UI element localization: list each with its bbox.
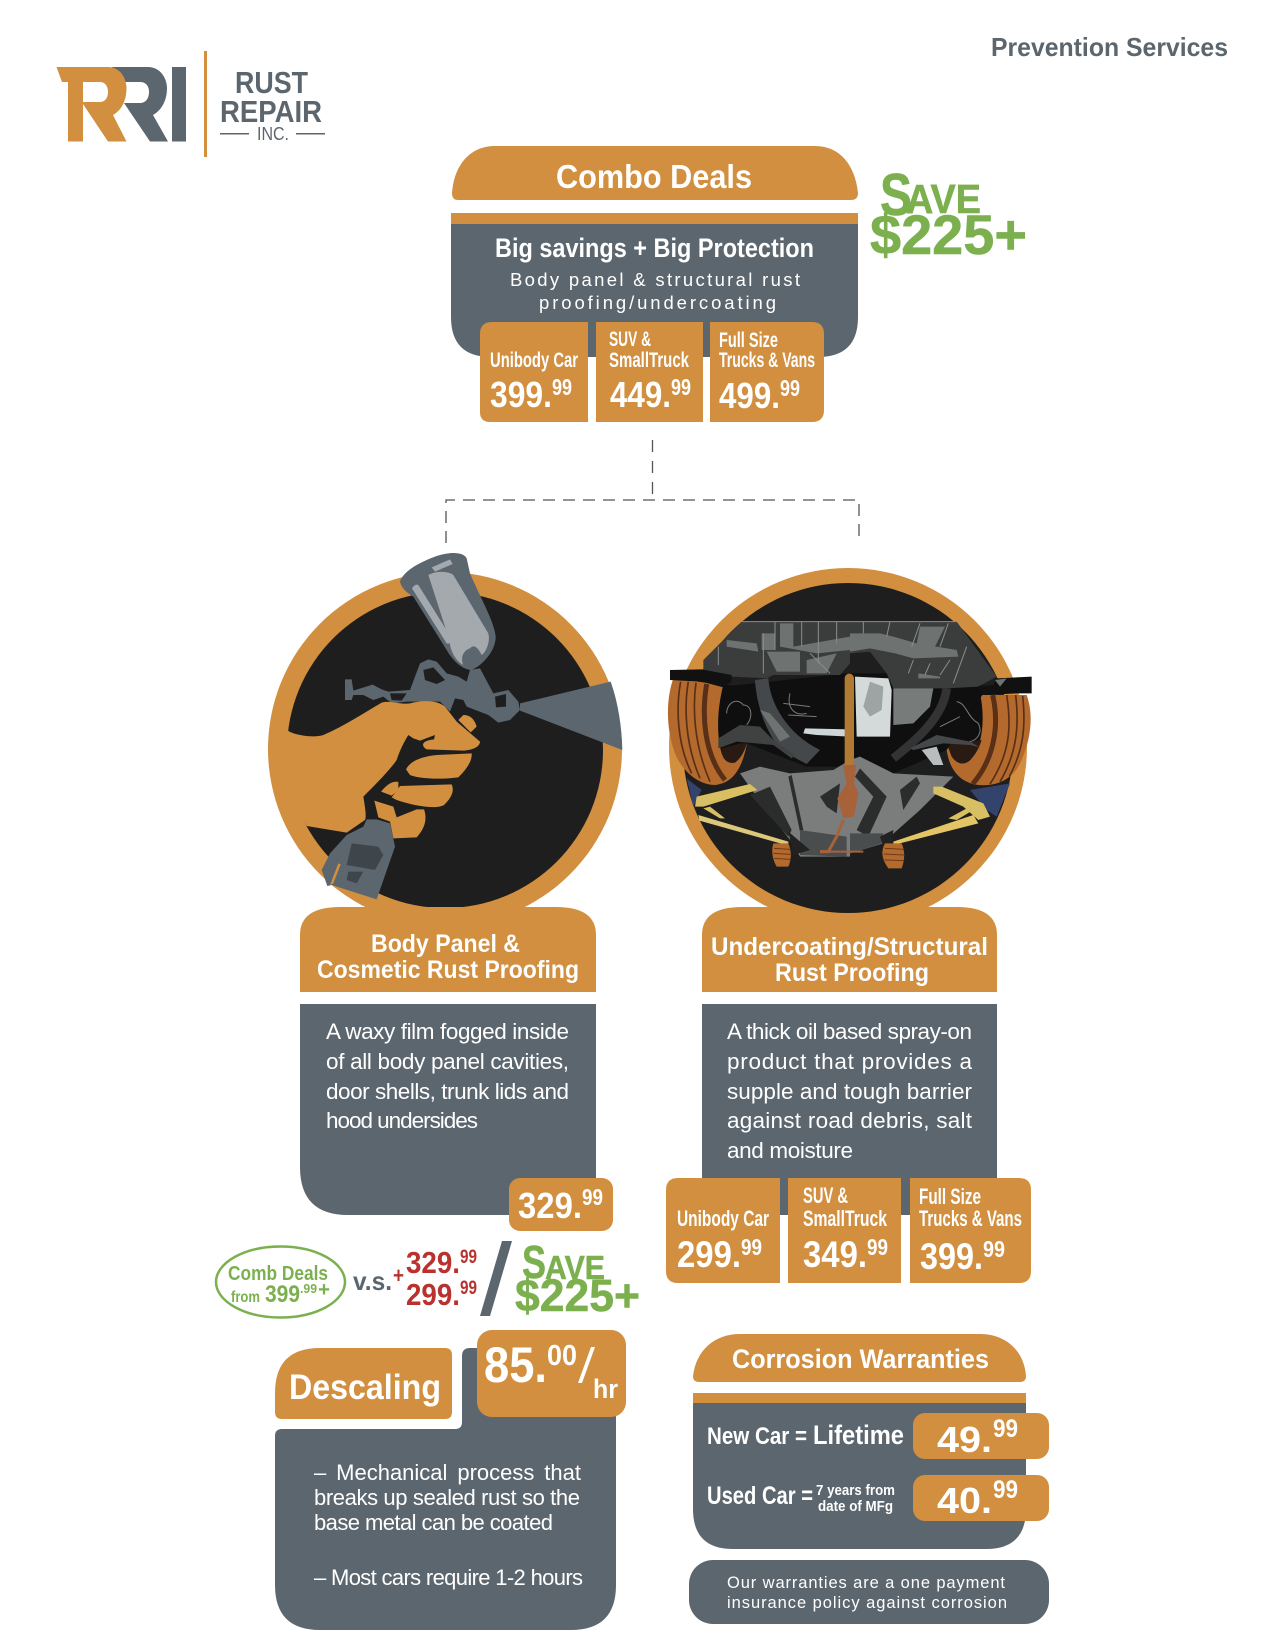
comparison: combo deals versus separate prices [216,1236,640,1321]
price box: unibody car [480,322,588,422]
combo deals text: Big savings + Big Protection [495,233,814,263]
undercoating title: Undercoating/Structural [711,933,988,961]
combo deals text: proofing/undercoating [539,292,776,313]
undercoating description text: and moisture [727,1138,853,1163]
price box: SUV and small truck: SmallTruck [609,349,689,372]
slash divider [480,1241,512,1316]
icon: bottom canister [322,819,395,899]
separate prices in red: 99 [460,1278,477,1299]
body panel title: Cosmetic Rust Proofing [317,956,579,984]
price box: SUV and small truck [788,1178,901,1283]
callout: save 225 plus [515,1236,640,1321]
icon: spray cone [520,682,622,750]
badge: combo deals from 399.99: from [231,1289,260,1306]
separate prices in red: 329. [406,1245,460,1280]
combo deals header [452,146,858,200]
price box: 329.99: 99 [582,1184,603,1210]
car underside: left half [668,622,850,867]
descaling description text [314,1460,583,1590]
badge: combo deals from 399.99: 399 [265,1281,300,1308]
price box: full size trucks and vans: Full Size [719,329,778,352]
used car row: 7 years from [816,1483,895,1499]
callout: save 225 plus: $225+ [515,1270,640,1321]
price box: unibody car: Unibody Car [677,1206,769,1231]
corrosion warranties title: Corrosion Warranties [732,1344,989,1374]
price box: SUV and small truck: 99 [867,1234,888,1260]
undercoating description text: product that provides a [727,1049,972,1074]
price box: SUV and small truck: SUV & [609,328,651,351]
undercoating description text: A thick oil based spray-on [727,1019,972,1044]
callout: save 225 plus (top) [870,162,1027,266]
price box: 85.00 per hour: 00 [547,1340,577,1372]
price box: 85.00 per hour: 85. [484,1337,547,1393]
logo: Rust Repair Inc [56,51,325,157]
undercoating title: Rust Proofing [775,959,929,987]
new car row: 99 [993,1415,1018,1443]
combo deals text [495,233,814,313]
price box: unibody car: 399. [490,374,552,415]
descaling header [275,1348,452,1419]
corrosion warranties body [693,1403,1026,1549]
price box: SUV and small truck: 449. [610,374,671,415]
car underside: right half [850,622,1032,868]
undercoating description text: supple and tough barrier [727,1079,972,1104]
price box: 85.00 per hour [477,1330,626,1417]
warranty note: Our warranties are a one payment [727,1574,1005,1592]
panel: undercoating and structural rust proofing [666,907,1031,1283]
exhaust [820,678,863,852]
logo: Rust Repair Inc: REPAIR [220,94,322,129]
panel: combo deals [451,146,858,422]
body panel description text: door shells, trunk lids and [326,1079,569,1104]
separate prices in red: 99 [460,1247,477,1268]
panel: descaling [275,1330,626,1630]
panel: corrosion warranties [689,1334,1049,1624]
price box: SUV and small truck: 349. [803,1234,867,1275]
price box: 85.00 per hour: hr [593,1374,618,1404]
undercoating header [702,907,997,992]
used car row [707,1475,1049,1521]
price box: SUV and small truck: SUV & [803,1183,848,1208]
descaling description text: – Mechanical process that [314,1460,581,1485]
warranty note [689,1560,1049,1624]
descaling title: Descaling [289,1368,441,1407]
corrosion warranties header [693,1334,1026,1382]
price box: unibody car: Unibody Car [490,349,578,372]
callout: save 225 plus: S [522,1236,546,1288]
used car row: 40. [937,1480,992,1521]
connector: dashed bracket [446,440,859,543]
combo deals title: Combo Deals [556,158,752,195]
heading: Prevention Services: Prevention Services [991,32,1228,62]
logo: Rust Repair Inc: RUST [235,65,308,100]
price box: 329.99: 329. [518,1185,582,1226]
body panel description text: of all body panel cavities, [326,1049,569,1074]
callout: save 225 plus: AVE [545,1249,605,1286]
price box: full size trucks and vans [910,1178,1031,1283]
descaling description text: – Most cars require 1-2 hours [314,1565,583,1590]
combo deals body [451,224,858,357]
price box: unibody car: 99 [741,1234,762,1260]
badge: combo deals from 399.99: Comb Deals [228,1263,328,1285]
panel: body panel and cosmetic rust proofing [300,907,613,1231]
price box: full size trucks and vans [710,322,824,422]
icon: hand [280,701,480,833]
body panel description panel [300,1004,596,1215]
callout: save 225 plus (top): AVE [906,176,981,222]
used car row: date of MFg [818,1499,893,1515]
new car row: 49. [937,1419,992,1460]
price box: full size trucks and vans: 99 [983,1236,1005,1262]
separate prices in red: + [393,1263,404,1288]
descaling description text: base metal can be coated [314,1510,553,1535]
badge: combo deals from 399.99: + [318,1279,330,1301]
price box: SUV and small truck: SmallTruck [803,1206,888,1231]
callout: save 225 plus (top): $225+ [870,203,1027,266]
separate prices in red [393,1245,477,1312]
label: versus: v.s. [353,1266,392,1296]
undercoating description text: against road debris, salt [727,1108,973,1133]
price box: unibody car [666,1178,780,1283]
used car row: 99 [993,1476,1018,1504]
price box: unibody car: 99 [552,374,572,400]
illustration: spray gun in hand [268,553,622,926]
body panel description text: A waxy film fogged inside [326,1019,569,1044]
illustration: car undercarriage [668,568,1032,926]
badge: combo deals from 399.99 [216,1246,345,1318]
undercoating description text [727,1019,973,1163]
combo deals text: Body panel & structural rust [510,269,800,290]
warranty note: insurance policy against corrosion [727,1594,1007,1612]
new car row: New Car = [707,1423,807,1450]
new car row [707,1413,1049,1460]
price box: unibody car: 299. [677,1234,741,1275]
descaling description text: breaks up sealed rust so the [314,1485,580,1510]
callout: save 225 plus (top): S [880,162,912,228]
descaling body [275,1348,616,1630]
price box: full size trucks and vans: 399. [920,1236,983,1277]
body panel description text [326,1019,569,1133]
logo: Rust Repair Inc: INC. [257,124,289,144]
used car row: Used Car = [707,1482,813,1510]
undercoating title [711,933,988,987]
body panel title: Body Panel & [371,930,520,958]
undercoating description panel [702,1004,997,1215]
body panel description text: hood undersides [326,1108,478,1133]
icon: paint cup [400,553,496,670]
price box: SUV and small truck [596,322,703,422]
price box: full size trucks and vans: 99 [780,375,800,401]
body panel header [300,907,596,992]
new car row: Lifetime [813,1420,904,1450]
price box: full size trucks and vans: 499. [719,375,780,416]
price box: 329.99 [509,1178,613,1231]
price box: SUV and small truck: 99 [671,374,691,400]
price box: full size trucks and vans: Trucks & Vans [719,349,815,372]
body panel title [317,930,579,984]
price box: full size trucks and vans: Trucks & Vans [919,1206,1022,1231]
separate prices in red: 299. [406,1277,460,1312]
price box: full size trucks and vans: Full Size [919,1184,981,1209]
icon: spray gun body [345,659,520,723]
badge: combo deals from 399.99: .99 [300,1281,317,1296]
